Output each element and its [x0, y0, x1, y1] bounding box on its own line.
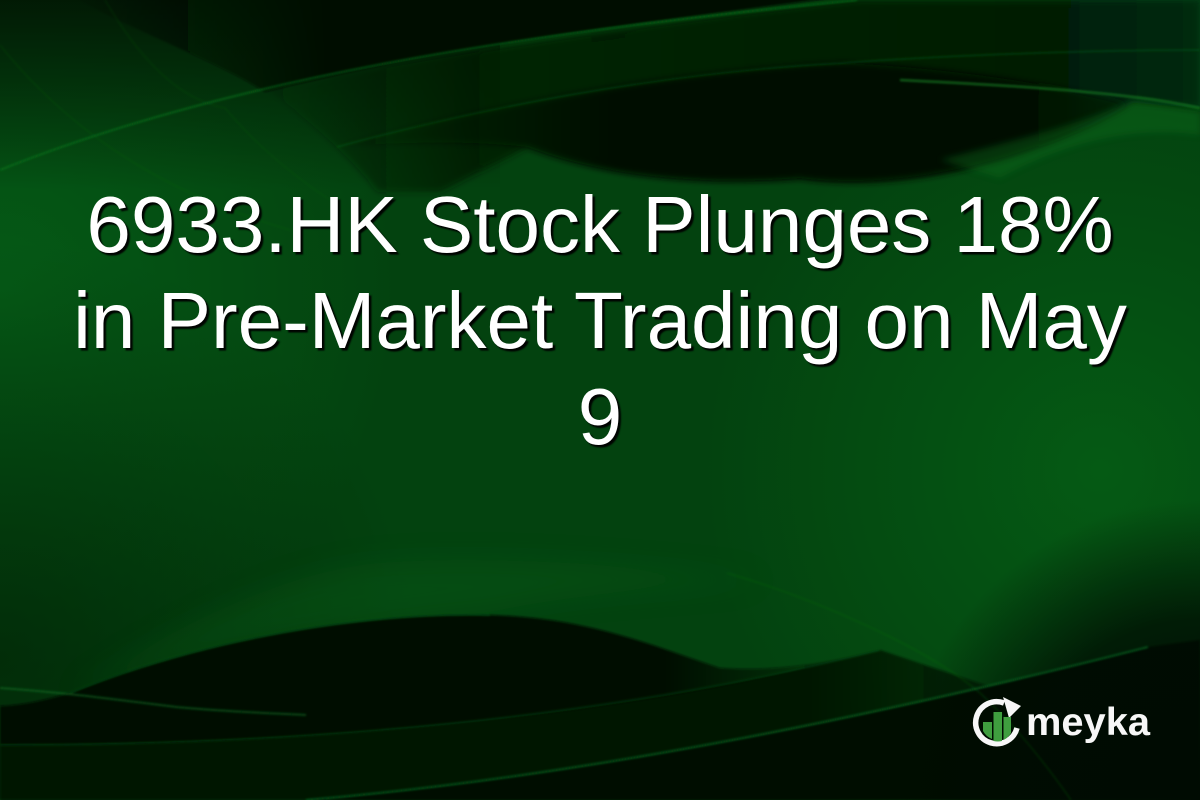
top dark sky	[70, 0, 857, 92]
lower bright wave band	[70, 560, 765, 695]
bottom dark area	[306, 640, 1200, 800]
top right bright band	[940, 100, 1200, 178]
logo: meyka	[972, 697, 1150, 746]
icon: circular arrow with bars	[976, 697, 1021, 744]
lower dark band	[0, 650, 1150, 800]
top region under first curve	[268, 0, 1200, 192]
lower dark hill	[0, 615, 880, 745]
lower lines	[0, 573, 1148, 800]
wordmark: meyka	[1026, 701, 1150, 744]
dark leaf	[337, 63, 1128, 181]
top lines	[0, 0, 1200, 230]
title: 6933.HK Stock Plunges 18% in Pre-Market Trading on May 9	[73, 180, 1127, 461]
